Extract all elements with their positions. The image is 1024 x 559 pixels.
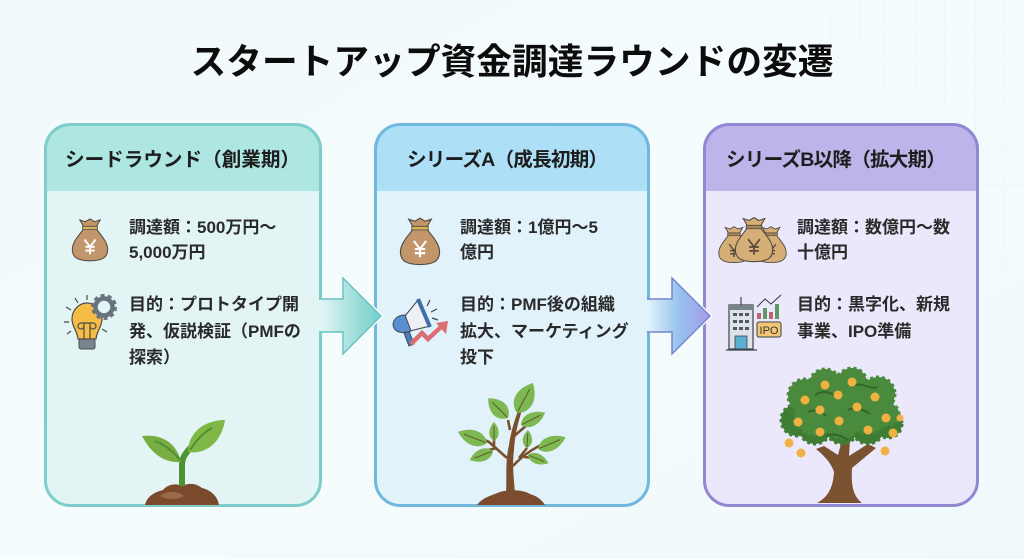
text: series A purpose: 目的：PMF後の組織 [460, 295, 615, 314]
panel: series A [374, 123, 650, 507]
heading: series B: シリーズB以降（拡大期） [726, 148, 946, 171]
text: seed amount: 調達額：500万円～ [129, 218, 276, 237]
panel: seed round [44, 123, 322, 507]
icon: sprout [142, 420, 225, 505]
panel: series B [703, 123, 979, 507]
text: seed amount: 5,000万円 [129, 243, 206, 262]
arrow: seed to series A [319, 278, 381, 354]
icon: building and IPO chart: IPO [760, 325, 779, 337]
icon: light bulb and gear [64, 295, 116, 349]
title: スタートアップ資金調達ラウンドの変遷 [190, 42, 834, 82]
icon: money bag [72, 219, 108, 261]
heading: seed: シードラウンド（創業期） [65, 149, 300, 171]
icon: fruit tree [781, 368, 904, 503]
text: series A amount: 調達額：1億円～5 [460, 218, 598, 237]
icon: young tree [455, 379, 568, 505]
text: series B amount: 調達額：数億円～数 [797, 218, 950, 237]
text: series A purpose: 拡大、マーケティング [460, 321, 629, 341]
text: series A purpose: 投下 [460, 348, 494, 367]
icon: three money bags [719, 218, 786, 263]
text: seed purpose: 発、仮説検証（PMFの [129, 322, 301, 341]
text: series B purpose: 事業、IPO準備 [797, 321, 911, 341]
arrow: series A to series B [647, 278, 710, 354]
text: seed purpose: 目的：プロトタイプ開 [129, 295, 299, 314]
icon: megaphone and rising arrow [393, 299, 448, 346]
text: seed purpose: 探索） [129, 348, 180, 367]
text: series B purpose: 目的：黒字化、新規 [797, 295, 950, 314]
heading: series A: シリーズA（成長初期） [407, 148, 608, 171]
text: series A amount: 億円 [460, 243, 494, 262]
icon: money bag [400, 218, 440, 265]
text: series B amount: 十億円 [797, 243, 848, 262]
icon: building and IPO chart [726, 295, 781, 350]
